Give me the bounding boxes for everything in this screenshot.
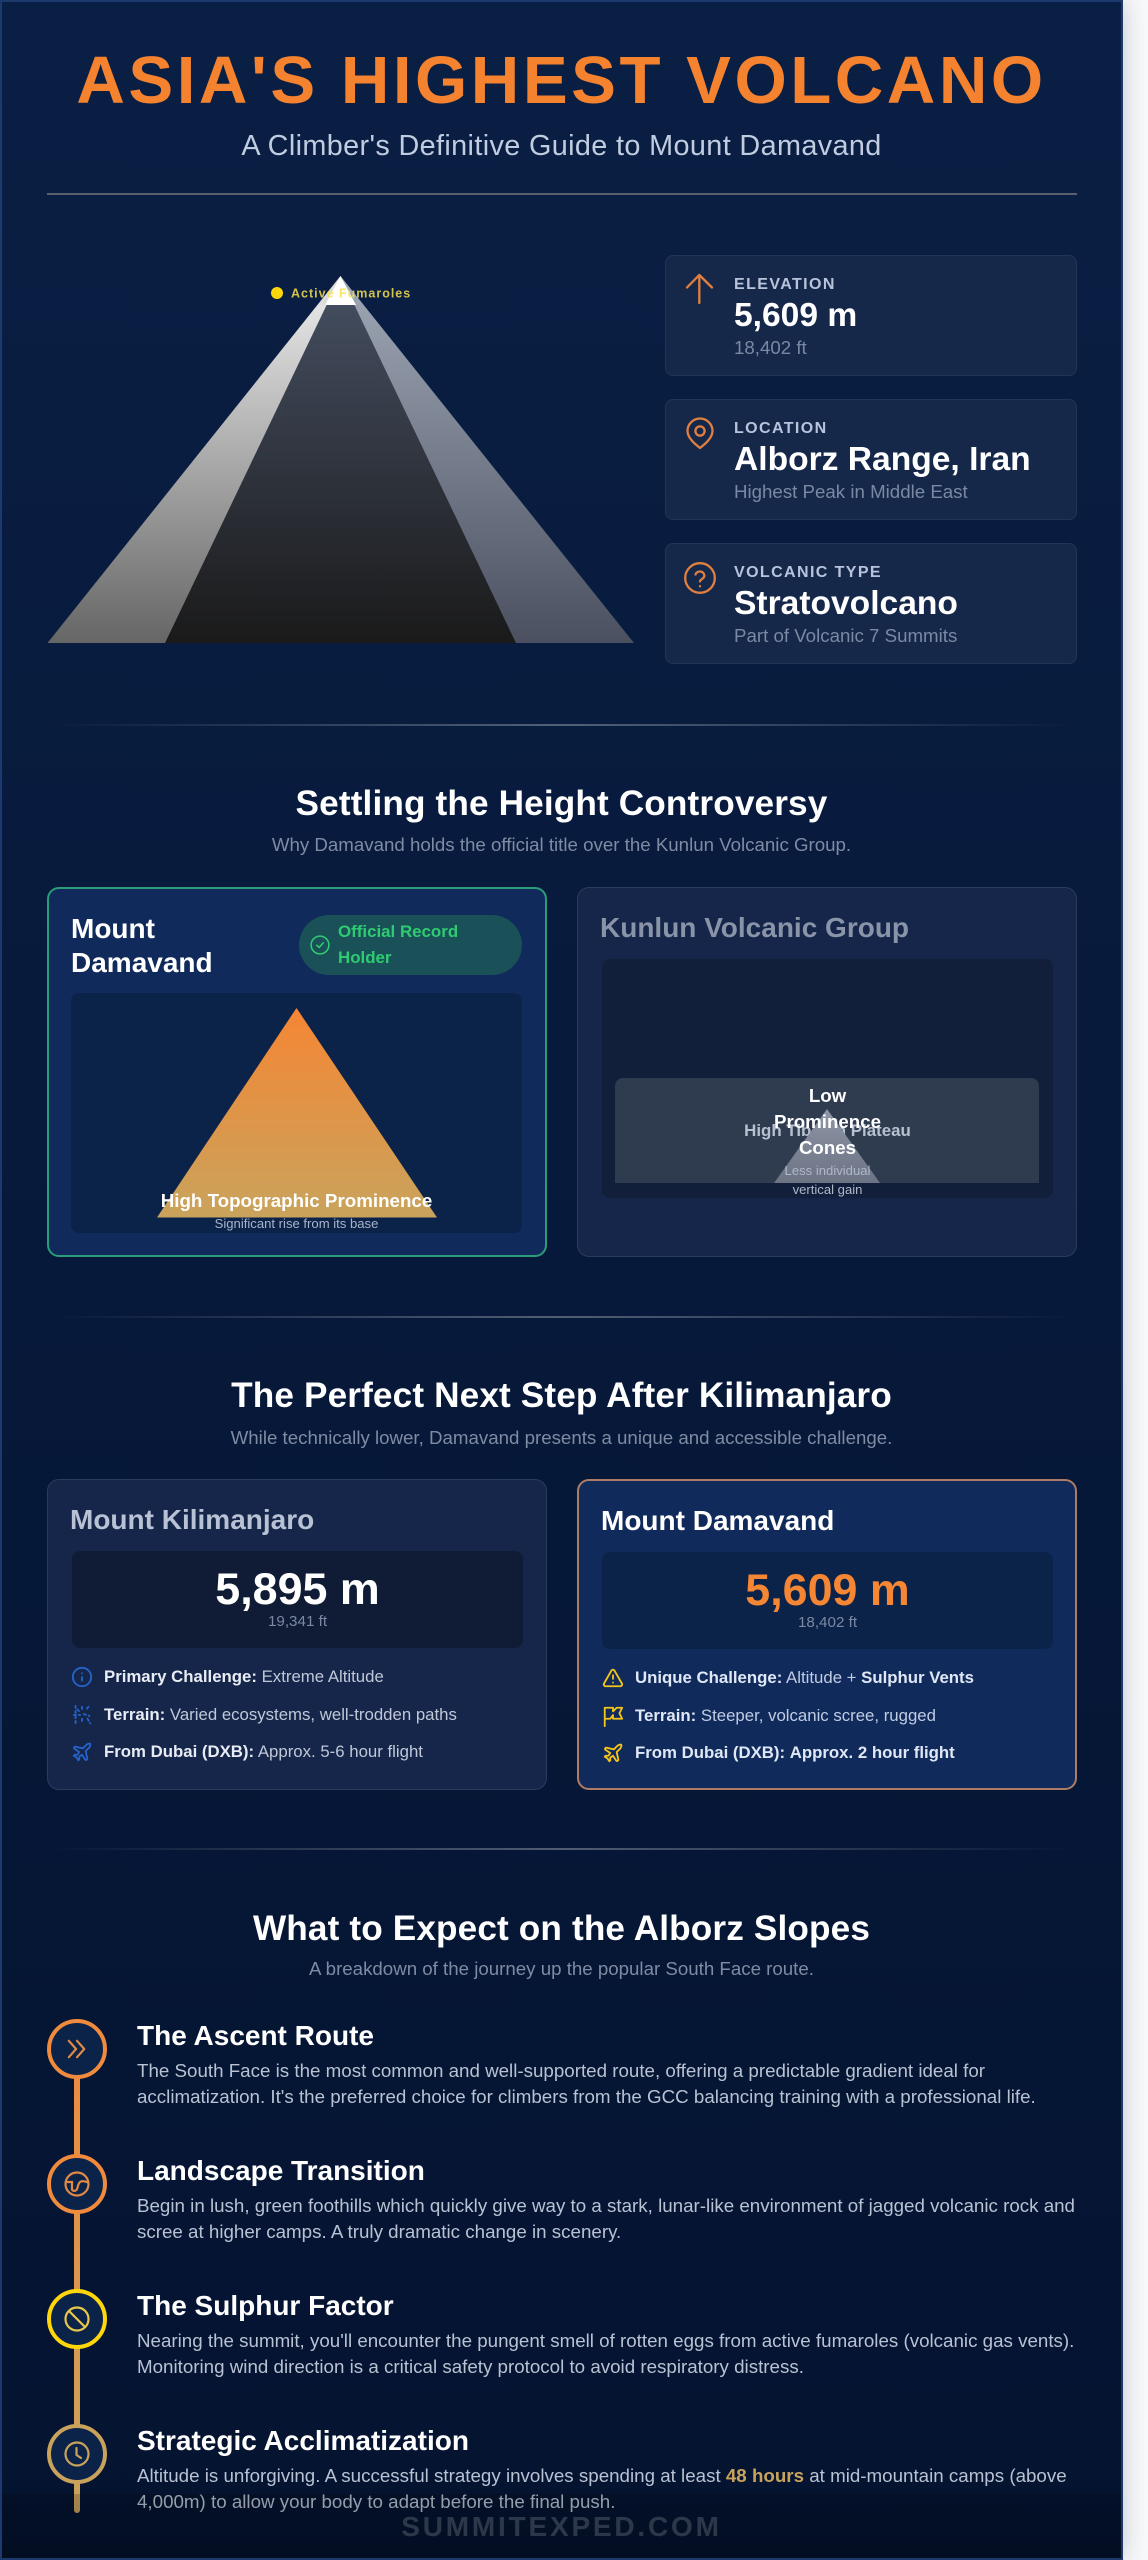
- card title: Damavand: [71, 947, 213, 978]
- step title: Strategic Acclimatization: [137, 2425, 469, 2456]
- diagram caption: High Topographic Prominence: [161, 1190, 432, 1211]
- fumarole marker: Active Fumaroles: [291, 286, 411, 300]
- stat card: location: [665, 399, 1077, 520]
- label: ELEVATION: [734, 276, 836, 293]
- node icon: [47, 2154, 107, 2214]
- row text: Terrain: Steeper, volcanic scree, rugged: [635, 1706, 936, 1725]
- icon: info: [72, 1666, 92, 1688]
- chevrons: [68, 2040, 86, 2058]
- icon: map pin: [686, 417, 714, 450]
- heading: Settling the Height Controversy: [296, 784, 827, 823]
- step: the sulphur factor: [47, 2289, 1074, 2377]
- cone note: Less individual: [785, 1163, 870, 1178]
- height feet: 19,341 ft: [268, 1613, 327, 1630]
- note: Part of Volcanic 7 Summits: [734, 625, 957, 646]
- section heading: alborz slopes: [253, 1909, 870, 1979]
- icon: arrow up: [686, 274, 714, 304]
- timeline connector: [74, 2050, 80, 2513]
- value: Alborz Range, Iran: [734, 441, 1031, 478]
- right face: [340, 276, 634, 643]
- step title: The Ascent Route: [137, 2020, 374, 2051]
- height block: [602, 1552, 1053, 1649]
- height value: 5,609 m: [745, 1565, 910, 1615]
- step text: [137, 2328, 1074, 2380]
- icon: plane: [604, 1744, 622, 1762]
- plateau label: High Tibetan Plateau: [744, 1121, 911, 1140]
- icon: flag: [604, 1706, 624, 1727]
- icon: question circle: [684, 562, 716, 594]
- step text: [137, 2195, 1075, 2242]
- subheading: While technically lower, Damavand presents a unique and accessible challenge.: [231, 1427, 892, 1448]
- step text: 4,000m) to allow your body to adapt before the final push.: [137, 2491, 615, 2512]
- icon: warning triangle: [602, 1668, 624, 1688]
- card title: Mount Damavand: [601, 1505, 834, 1536]
- list row: flight: [604, 1743, 955, 1762]
- list row: challenge: [602, 1668, 974, 1688]
- node icon: [47, 2289, 107, 2349]
- step text: Monitoring wind direction is a critical safety protocol to avoid respiratory distress.: [137, 2356, 804, 2377]
- cone caption: Low: [809, 1085, 846, 1106]
- stat card: volcanic type: [665, 543, 1077, 664]
- step text: [137, 2060, 1036, 2107]
- section heading: height controversy: [272, 784, 851, 855]
- stat card: elevation: [665, 255, 1077, 376]
- subheading: Why Damavand holds the official title over the Kunlun Volcanic Group.: [272, 834, 851, 855]
- icon: loader dots: [72, 1704, 92, 1724]
- diagram note: Significant rise from its base: [215, 1216, 378, 1231]
- prominence diagram: [602, 959, 1053, 1198]
- height feet: 18,402 ft: [798, 1614, 857, 1631]
- note: Highest Peak in Middle East: [734, 481, 968, 502]
- grey cone: [774, 1109, 880, 1183]
- height value: 5,895 m: [215, 1564, 380, 1614]
- badge text: [338, 922, 458, 967]
- badge: official record holder: [299, 915, 522, 975]
- cone caption: Cones: [799, 1137, 856, 1158]
- icon: plane: [72, 1742, 92, 1762]
- panel: Kunlun Volcanic Group: [577, 887, 1077, 1257]
- value: Stratovolcano: [734, 585, 958, 622]
- node icon: [47, 2019, 107, 2079]
- prohibited sign: [64, 2306, 90, 2332]
- label: LOCATION: [734, 420, 828, 437]
- footer brand: SUMMITEXPED.COM: [401, 2511, 722, 2542]
- prominence diagram: [71, 993, 522, 1233]
- list row: challenge: [72, 1666, 384, 1688]
- row text: Unique Challenge: Altitude + Sulphur Vents: [635, 1668, 974, 1687]
- step text: Begin in lush, green foothills which quickly give way to a stark, lunar-like environment of jagged volcanic rock and: [137, 2195, 1075, 2216]
- step text: Altitude is unforgiving. A successful strategy involves spending at least 48 hours at mid-mountain camps (above: [137, 2465, 1067, 2486]
- step text: scree at higher camps. A truly dramatic change in scenery.: [137, 2221, 621, 2242]
- cone note: [785, 1163, 870, 1197]
- header divider: [47, 193, 1077, 195]
- card title: Kunlun Volcanic Group: [600, 912, 909, 943]
- value: 5,609 m: [734, 297, 857, 334]
- icon: check circle: [310, 935, 330, 955]
- step: landscape transition: [47, 2154, 1075, 2242]
- note: 18,402 ft: [734, 337, 807, 358]
- cone caption: [774, 1085, 881, 1158]
- panel: Mount Damavand: [47, 887, 547, 1257]
- subheading: A breakdown of the journey up the popular South Face route.: [309, 1958, 814, 1979]
- step: strategic acclimatization: [47, 2424, 1077, 2524]
- height block: [72, 1551, 523, 1648]
- heading: What to Expect on the Alborz Slopes: [253, 1909, 870, 1948]
- cone caption: Prominence: [774, 1111, 881, 1132]
- section heading: next step: [230, 1376, 892, 1448]
- globe: [64, 2171, 90, 2197]
- orange peak: [157, 1008, 437, 1218]
- step title: Landscape Transition: [137, 2155, 425, 2186]
- subtitle: A Climber's Definitive Guide to Mount Damavand: [241, 130, 882, 162]
- step text: Nearing the summit, you'll encounter the pungent smell of rotten eggs from active fumaroles (volcanic gas vents).: [137, 2330, 1074, 2351]
- plateau block: [615, 1078, 1039, 1183]
- badge text: Official Record: [338, 922, 458, 941]
- step: the ascent route: [47, 2019, 1036, 2107]
- list row: flight: [72, 1742, 423, 1762]
- row text: Primary Challenge: Extreme Altitude: [104, 1667, 384, 1686]
- node icon: [47, 2424, 107, 2484]
- step title: The Sulphur Factor: [137, 2290, 394, 2321]
- row text: From Dubai (DXB): Approx. 2 hour flight: [635, 1743, 955, 1762]
- label: VOLCANIC TYPE: [734, 564, 882, 581]
- clock: [64, 2441, 90, 2467]
- panel: Mount Kilimanjaro: [47, 1479, 547, 1790]
- list row: terrain: [72, 1704, 457, 1724]
- snow cap: [325, 276, 356, 305]
- row text: From Dubai (DXB): Approx. 5-6 hour flight: [104, 1742, 423, 1761]
- row text: Terrain: Varied ecosystems, well-trodden paths: [104, 1705, 457, 1724]
- header: [47, 43, 1077, 195]
- badge text: Holder: [338, 948, 392, 967]
- mountain illustration: [48, 276, 634, 643]
- step text: acclimatization. It's the preferred choice for climbers from the GCC balancing training with a professional life.: [137, 2086, 1036, 2107]
- left face: [48, 276, 340, 643]
- panel: Mount Damavand comparison: [577, 1479, 1077, 1790]
- heading: The Perfect Next Step After Kilimanjaro: [231, 1376, 892, 1415]
- step text: The South Face is the most common and well-supported route, offering a predictable gradient ideal for: [137, 2060, 985, 2081]
- footer band: [2, 2494, 1121, 2558]
- card title: [71, 913, 213, 978]
- card title: Mount Kilimanjaro: [70, 1504, 314, 1535]
- card title: Mount: [71, 913, 155, 944]
- step text: [137, 2463, 1067, 2515]
- title: ASIA'S HIGHEST VOLCANO: [76, 43, 1047, 118]
- list row: terrain: [604, 1706, 936, 1727]
- central face: [165, 276, 516, 643]
- cone note: vertical gain: [793, 1182, 862, 1197]
